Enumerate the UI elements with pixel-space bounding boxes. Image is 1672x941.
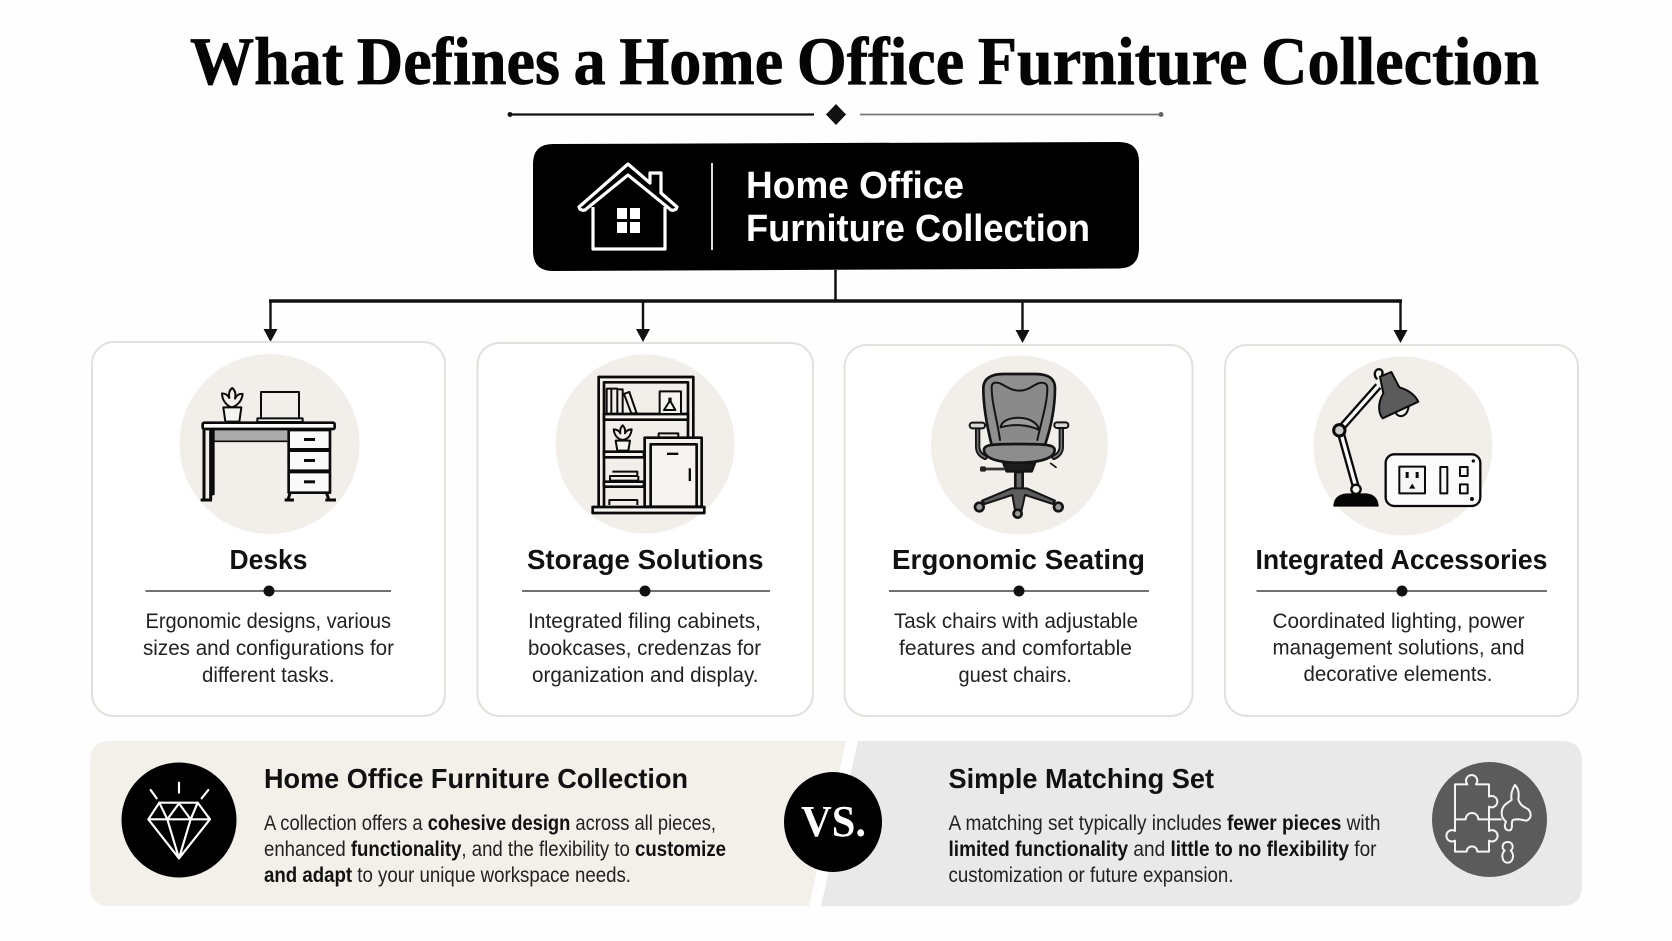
description: A collection offers a cohesive design across all pieces,	[264, 812, 716, 835]
description	[143, 610, 394, 687]
description	[894, 610, 1138, 687]
title: What Defines a Home Office Furniture Collection	[190, 23, 1539, 99]
panel: comparison, home office furniture collection	[90, 741, 846, 906]
main header box	[533, 142, 1139, 271]
heading: Simple Matching Set	[948, 763, 1214, 794]
header text: Home Office	[746, 165, 964, 207]
heading: Storage Solutions	[527, 544, 764, 575]
description: bookcases, credenzas for	[528, 637, 761, 660]
description: organization and display.	[532, 664, 758, 687]
icon: diamond badge	[122, 762, 236, 878]
icon: house	[579, 164, 677, 249]
panel: comparison, simple matching set	[821, 741, 1582, 906]
heading: Home Office Furniture Collection	[264, 763, 688, 794]
description: guest chairs.	[958, 664, 1072, 687]
icon: puzzle badge	[1432, 762, 1547, 877]
description: customization or future expansion.	[948, 864, 1234, 887]
description: Ergonomic designs, various	[146, 610, 391, 633]
header text	[746, 165, 1090, 250]
description	[1272, 610, 1524, 686]
vs badge: VS.	[801, 797, 866, 846]
description: different tasks.	[202, 664, 334, 687]
icon: office chair	[970, 374, 1068, 518]
connector arrows	[264, 270, 1408, 343]
description: limited functionality and little to no flexibility for	[948, 838, 1377, 861]
header text: Furniture Collection	[746, 208, 1090, 250]
panel: ergonomic seating	[844, 345, 1192, 716]
icon: bookcase and cabinet	[593, 377, 704, 513]
description	[528, 610, 761, 687]
description	[264, 812, 726, 887]
title divider with diamond	[508, 104, 1164, 125]
icon: desk lamp and power outlet	[1333, 369, 1480, 507]
panel: desks	[92, 342, 445, 716]
panel: storage solutions	[478, 343, 813, 716]
description: enhanced functionality, and the flexibility to customize	[264, 838, 726, 861]
description: A matching set typically includes fewer pieces with	[948, 812, 1380, 835]
heading: Desks	[230, 544, 308, 575]
heading: Integrated Accessories	[1256, 544, 1548, 575]
vs badge	[784, 772, 882, 872]
description: Coordinated lighting, power	[1272, 610, 1524, 633]
icon: desk	[201, 388, 336, 500]
description: Task chairs with adjustable	[894, 610, 1138, 633]
description	[948, 812, 1380, 887]
description: decorative elements.	[1304, 663, 1492, 686]
description: features and comfortable	[899, 637, 1132, 660]
description: Integrated filing cabinets,	[528, 610, 761, 633]
description: and adapt to your unique workspace needs.	[264, 864, 631, 887]
description: management solutions, and	[1272, 636, 1524, 660]
description: sizes and configurations for	[143, 637, 394, 660]
heading: Ergonomic Seating	[892, 544, 1145, 575]
panel: integrated accessories	[1225, 345, 1578, 716]
